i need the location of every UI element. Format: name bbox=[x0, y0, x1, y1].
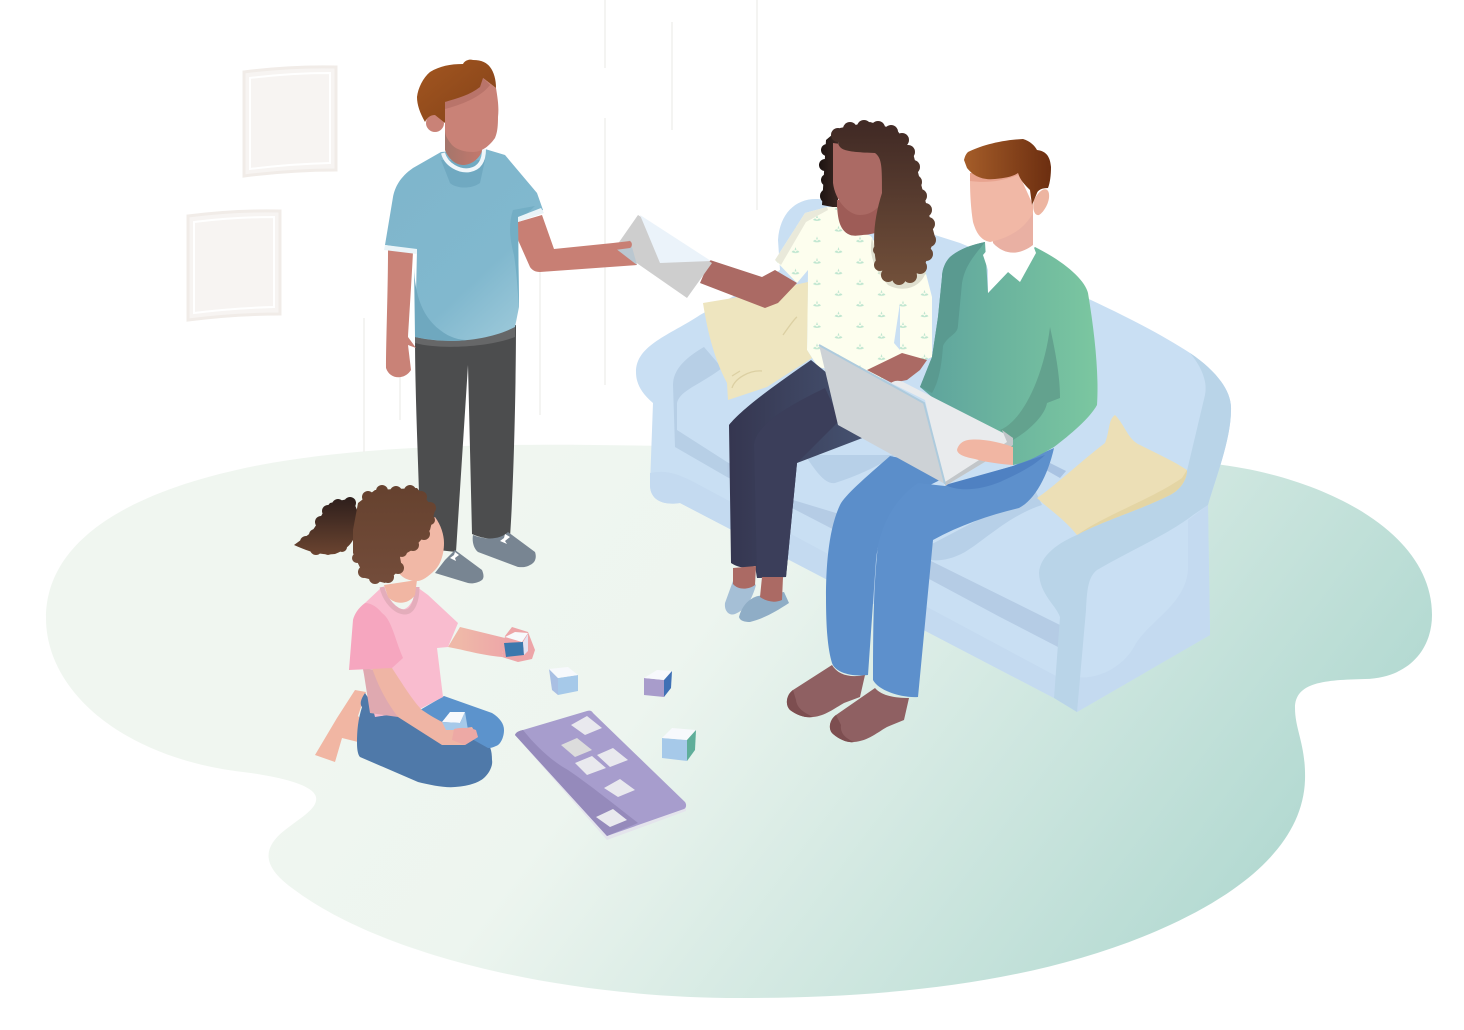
girl hand with block bbox=[502, 627, 535, 662]
sweater bbox=[920, 242, 1098, 465]
back hair bbox=[819, 128, 840, 208]
sleeve bbox=[349, 603, 403, 670]
front panel shade bbox=[1077, 505, 1210, 712]
seat front band bbox=[727, 462, 1060, 647]
neck bbox=[445, 128, 483, 165]
left inner arm shade bbox=[673, 347, 727, 477]
boy thumb bbox=[613, 241, 632, 250]
man hand bbox=[957, 439, 1013, 465]
ear bbox=[1033, 189, 1049, 215]
woman neck bbox=[837, 200, 880, 237]
laptop screen bbox=[819, 345, 945, 484]
forearm bbox=[867, 353, 927, 383]
right outer band bbox=[1175, 353, 1231, 527]
shirt bbox=[363, 587, 458, 717]
block 1 bbox=[549, 667, 578, 695]
man bbox=[787, 139, 1098, 742]
sneaker left bbox=[435, 550, 484, 583]
floor blob bbox=[46, 445, 1432, 998]
sleeve gap bbox=[894, 303, 900, 350]
sofa bbox=[636, 199, 1231, 712]
book bbox=[515, 711, 686, 840]
blouse trim left bbox=[775, 207, 828, 265]
book cover bbox=[515, 711, 686, 836]
jeans light bbox=[420, 696, 504, 748]
right slipper bbox=[739, 592, 789, 622]
pillow right bbox=[1037, 415, 1187, 535]
hair bbox=[964, 139, 1051, 205]
collar shade bbox=[441, 160, 485, 188]
right armrest bbox=[1039, 473, 1208, 712]
sleeve cuffs bbox=[384, 245, 417, 254]
book cards bbox=[561, 716, 635, 827]
bar behind pillow bbox=[1046, 463, 1066, 478]
jeans far leg bbox=[826, 456, 960, 675]
shoe right bbox=[830, 688, 909, 742]
ponytail bbox=[294, 497, 360, 555]
collar bbox=[443, 149, 484, 170]
face bbox=[970, 172, 1033, 242]
laptop base bbox=[891, 381, 1013, 486]
woman bbox=[725, 120, 936, 622]
picture frame upper bbox=[244, 67, 336, 176]
base band bbox=[650, 472, 1056, 698]
collar bbox=[983, 243, 1036, 293]
sleeve fold bbox=[510, 206, 535, 307]
laptop edge bbox=[819, 345, 945, 484]
seat shadow right bbox=[930, 490, 1042, 560]
picture frame lower bbox=[188, 211, 280, 320]
lace marks bbox=[450, 534, 510, 561]
navy legs bbox=[729, 360, 865, 578]
shoe left bbox=[787, 665, 865, 717]
wall lines bbox=[364, 0, 757, 452]
foot bbox=[315, 690, 367, 762]
waist band bbox=[415, 327, 515, 347]
sweater left shade bbox=[920, 242, 985, 393]
sofa silhouette bbox=[636, 199, 1231, 712]
boy bbox=[384, 60, 637, 583]
neck bbox=[993, 205, 1033, 254]
hair bbox=[352, 485, 436, 584]
trousers bbox=[415, 325, 516, 552]
block 3 bbox=[662, 728, 696, 761]
forehead shade bbox=[445, 78, 490, 109]
laptop corner bbox=[945, 430, 1013, 486]
face bbox=[445, 78, 498, 152]
right ankle bbox=[760, 577, 783, 602]
envelope bbox=[615, 215, 712, 298]
block in lap bbox=[442, 712, 478, 745]
ear bbox=[426, 114, 444, 132]
boy arm left bbox=[386, 250, 416, 377]
shirt left shade bbox=[414, 262, 467, 341]
blouse pattern bbox=[775, 207, 932, 380]
sweater fold bbox=[1000, 327, 1060, 440]
shirt bbox=[385, 149, 543, 341]
side shade bbox=[363, 668, 398, 717]
navy inner leg bbox=[754, 388, 840, 578]
left slipper bbox=[725, 570, 756, 615]
girl bbox=[294, 485, 505, 787]
boy arm right bbox=[518, 215, 637, 272]
hair bbox=[417, 60, 496, 123]
block 2 bbox=[644, 670, 672, 697]
seat shadow left bbox=[805, 455, 895, 483]
face bbox=[833, 143, 884, 215]
book spine shade bbox=[515, 730, 638, 836]
face bbox=[395, 517, 444, 581]
jeans near leg bbox=[873, 448, 1054, 697]
book page edge bbox=[515, 735, 686, 840]
woman arm bbox=[700, 260, 797, 308]
neck bbox=[384, 580, 417, 603]
shoe right sole bbox=[830, 715, 854, 742]
lap shade bbox=[945, 455, 1045, 489]
pillow left bbox=[703, 282, 812, 400]
laptop bbox=[819, 345, 1013, 486]
forearm bbox=[372, 668, 478, 745]
sneaker right bbox=[473, 532, 536, 567]
shoe left sole bbox=[787, 690, 813, 717]
front hair bbox=[831, 120, 936, 285]
jeans dark bbox=[357, 693, 492, 787]
arm to block bbox=[448, 627, 505, 657]
blouse bbox=[775, 207, 932, 380]
blouse trim hair bbox=[871, 238, 926, 289]
left ankle bbox=[733, 566, 756, 589]
collar bbox=[382, 587, 417, 612]
forehead shade bbox=[970, 168, 1018, 182]
